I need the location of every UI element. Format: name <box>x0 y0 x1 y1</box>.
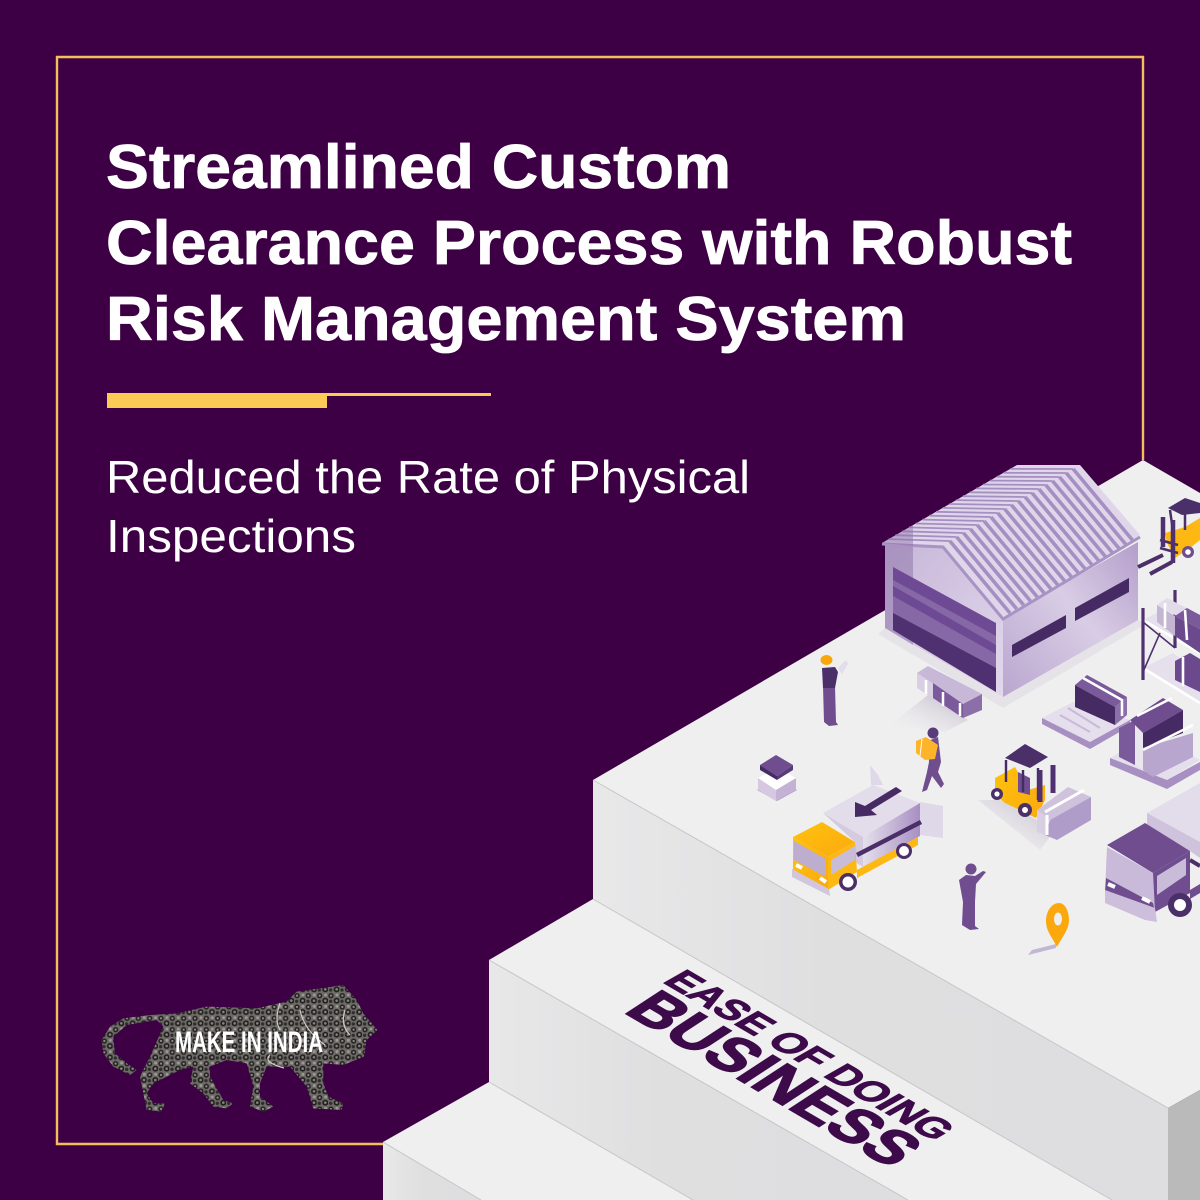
stair text: ease of doing business: BUSINESS <box>611 981 938 1176</box>
purple truck <box>1105 783 1200 922</box>
boxes near warehouse <box>890 666 982 732</box>
yellow truck <box>792 765 943 896</box>
forklift center <box>978 744 1091 850</box>
location pin <box>1028 903 1069 955</box>
truck direction arrow <box>855 787 902 817</box>
shelf boxes upper <box>1157 598 1200 653</box>
stairs <box>383 460 1200 1200</box>
warehouse roof <box>882 465 1140 619</box>
divider <box>107 393 491 408</box>
stair text: ease of doing business: EASE OF DOING <box>654 965 965 1146</box>
pallet with stacked boxes <box>1110 698 1200 789</box>
warehouse <box>878 465 1146 708</box>
pallet with dark box <box>1042 675 1130 749</box>
warehouse front wall <box>885 545 1003 697</box>
title: Clearance Process with Robust <box>106 209 1072 278</box>
subtitle <box>106 451 750 562</box>
warehouse door <box>893 567 996 692</box>
shelf boxes lower <box>1175 653 1200 692</box>
logo text: MAKE IN INDIA <box>175 1026 323 1059</box>
title: Risk Management System <box>106 285 906 354</box>
shelf with boxes <box>1143 590 1200 703</box>
subtitle: Reduced the Rate of Physical <box>106 451 750 503</box>
small open box <box>757 755 797 801</box>
truck cargo <box>823 765 943 867</box>
worker waving <box>959 864 986 930</box>
subtitle: Inspections <box>106 510 356 562</box>
warehouse side wall <box>1003 542 1138 697</box>
worker with hard hat <box>820 655 848 726</box>
title: Streamlined Custom <box>106 133 731 202</box>
forklift top right <box>1138 498 1200 574</box>
truck wheels <box>839 843 912 891</box>
worker carrying box <box>916 728 944 792</box>
title <box>106 133 1072 354</box>
logo: make in india lion <box>102 985 377 1112</box>
truck cab <box>792 822 857 896</box>
